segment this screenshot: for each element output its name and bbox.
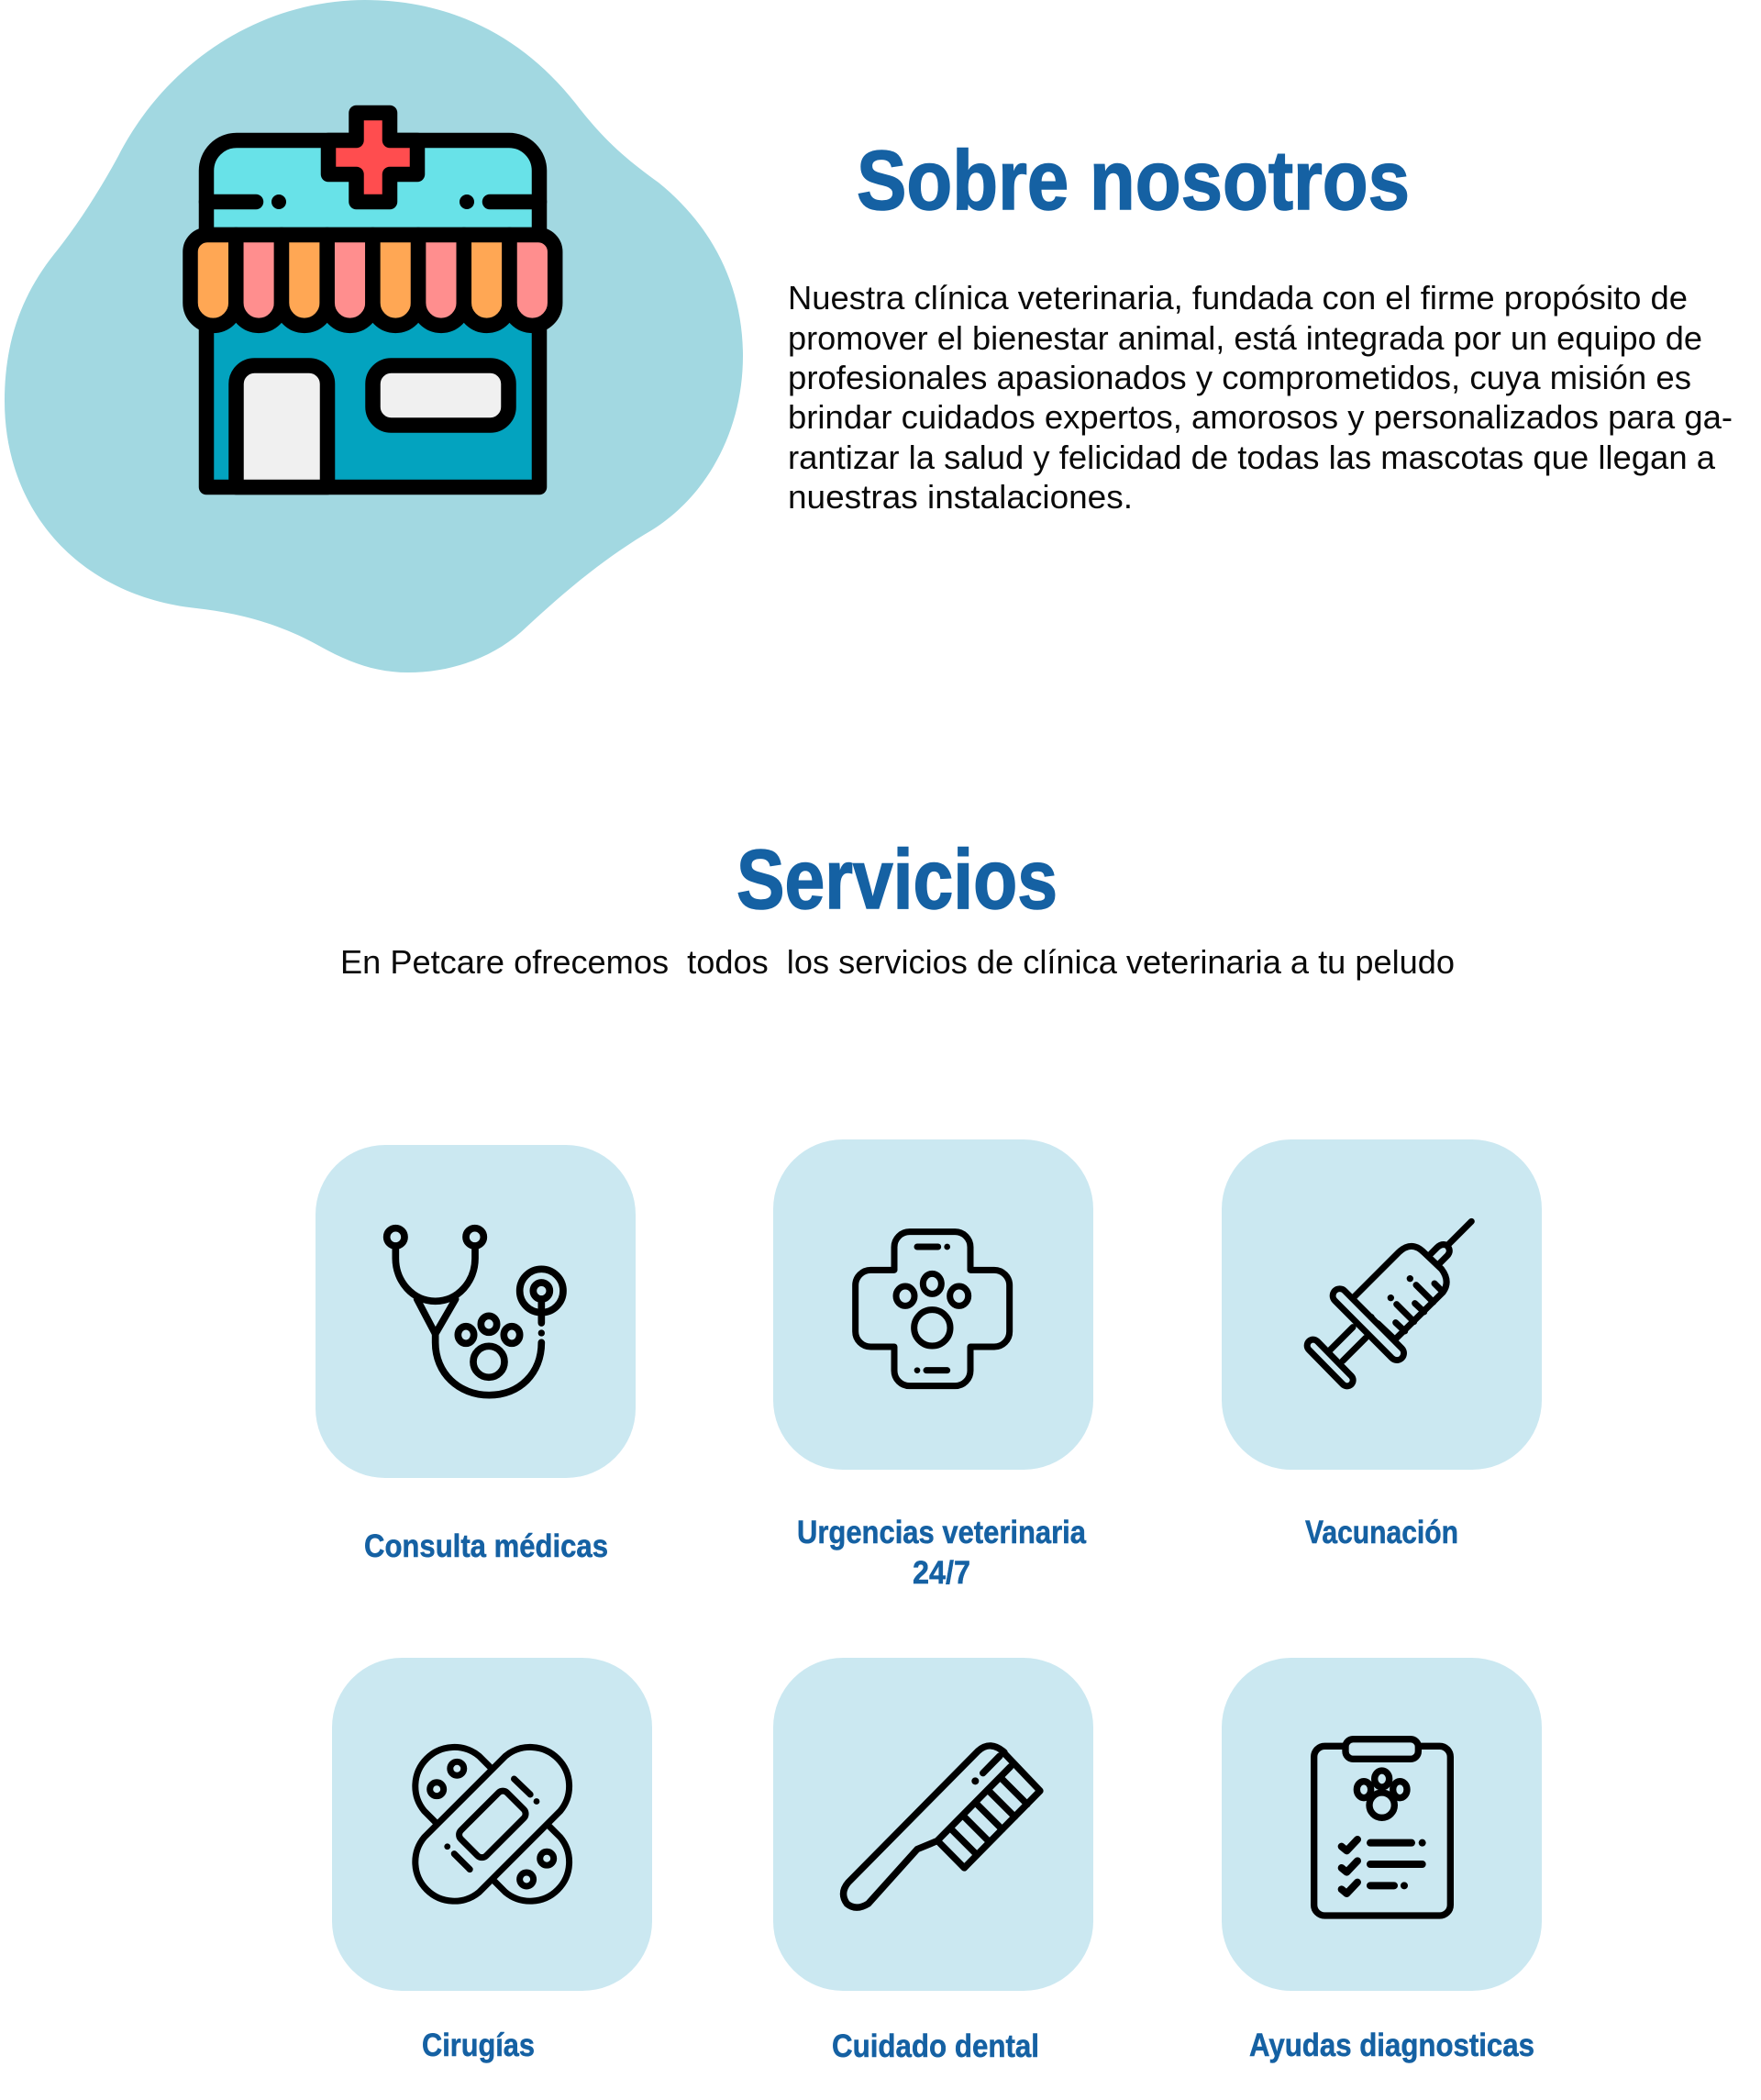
- text block: about paragraph: promover el bienestar animal, está integrada por un equipo de: [788, 319, 1702, 357]
- panel: service Urgencias veterinaria 24/7: [773, 1139, 1093, 1591]
- label: Cirugías: [422, 2028, 535, 2063]
- icon: clipboard with paw and checklist: [1314, 1739, 1450, 1916]
- icon: medical cross with paw: [856, 1232, 1010, 1386]
- icon: veterinary clinic storefront: [191, 113, 555, 487]
- text block: about paragraph: nuestras instalaciones.: [788, 478, 1133, 516]
- panel: service Cirugías: [332, 1658, 652, 2063]
- label: 24/7: [913, 1555, 970, 1591]
- panel: about us hero: [5, 0, 743, 672]
- panel: service Vacunación: [1222, 1139, 1542, 1550]
- text block: services intro: En Petcare ofrecemos todos los servicios de clínica veterinaria a tu peludo: [340, 943, 1455, 981]
- label: Ayudas diagnosticas: [1249, 2028, 1534, 2063]
- panel: service Consulta médicas: [316, 1145, 636, 1564]
- label: Cuidado dental: [832, 2028, 1039, 2064]
- card background: [1222, 1139, 1542, 1470]
- icon: syringe: [1313, 1221, 1471, 1380]
- icon: stethoscope with paw: [387, 1228, 563, 1395]
- text block: about paragraph: Nuestra clínica veterinaria, fundada con el firme propósito de: [788, 279, 1688, 317]
- icon: crossed bandages: [415, 1747, 570, 1901]
- label: Vacunación: [1305, 1515, 1458, 1550]
- card background: [1222, 1658, 1542, 1991]
- text block: about paragraph: profesionales apasionados y comprometidos, cuya misión es: [788, 359, 1691, 396]
- card background: [316, 1145, 636, 1478]
- heading: Servicios: Servicios: [737, 833, 1058, 927]
- card background: [773, 1658, 1093, 1991]
- text block: about paragraph: brindar cuidados expertos, amorosos y personalizados para ga-: [788, 398, 1733, 436]
- panel: service Ayudas diagnosticas: [1222, 1658, 1542, 2063]
- card background: [773, 1139, 1093, 1470]
- panel: service Cuidado dental: [773, 1658, 1093, 2064]
- label: Consulta médicas: [364, 1528, 608, 1564]
- card background: [332, 1658, 652, 1991]
- blob background: [5, 0, 743, 672]
- heading: Sobre nosotros: Sobre nosotros: [857, 134, 1410, 228]
- label: Urgencias veterinaria: [797, 1515, 1086, 1550]
- label: [797, 1515, 1086, 1591]
- text block: about paragraph: rantizar la salud y felicidad de todas las mascotas que llegan a: [788, 439, 1716, 476]
- icon: dental brush: [844, 1746, 1040, 1907]
- text block: about paragraph: [788, 279, 1733, 516]
